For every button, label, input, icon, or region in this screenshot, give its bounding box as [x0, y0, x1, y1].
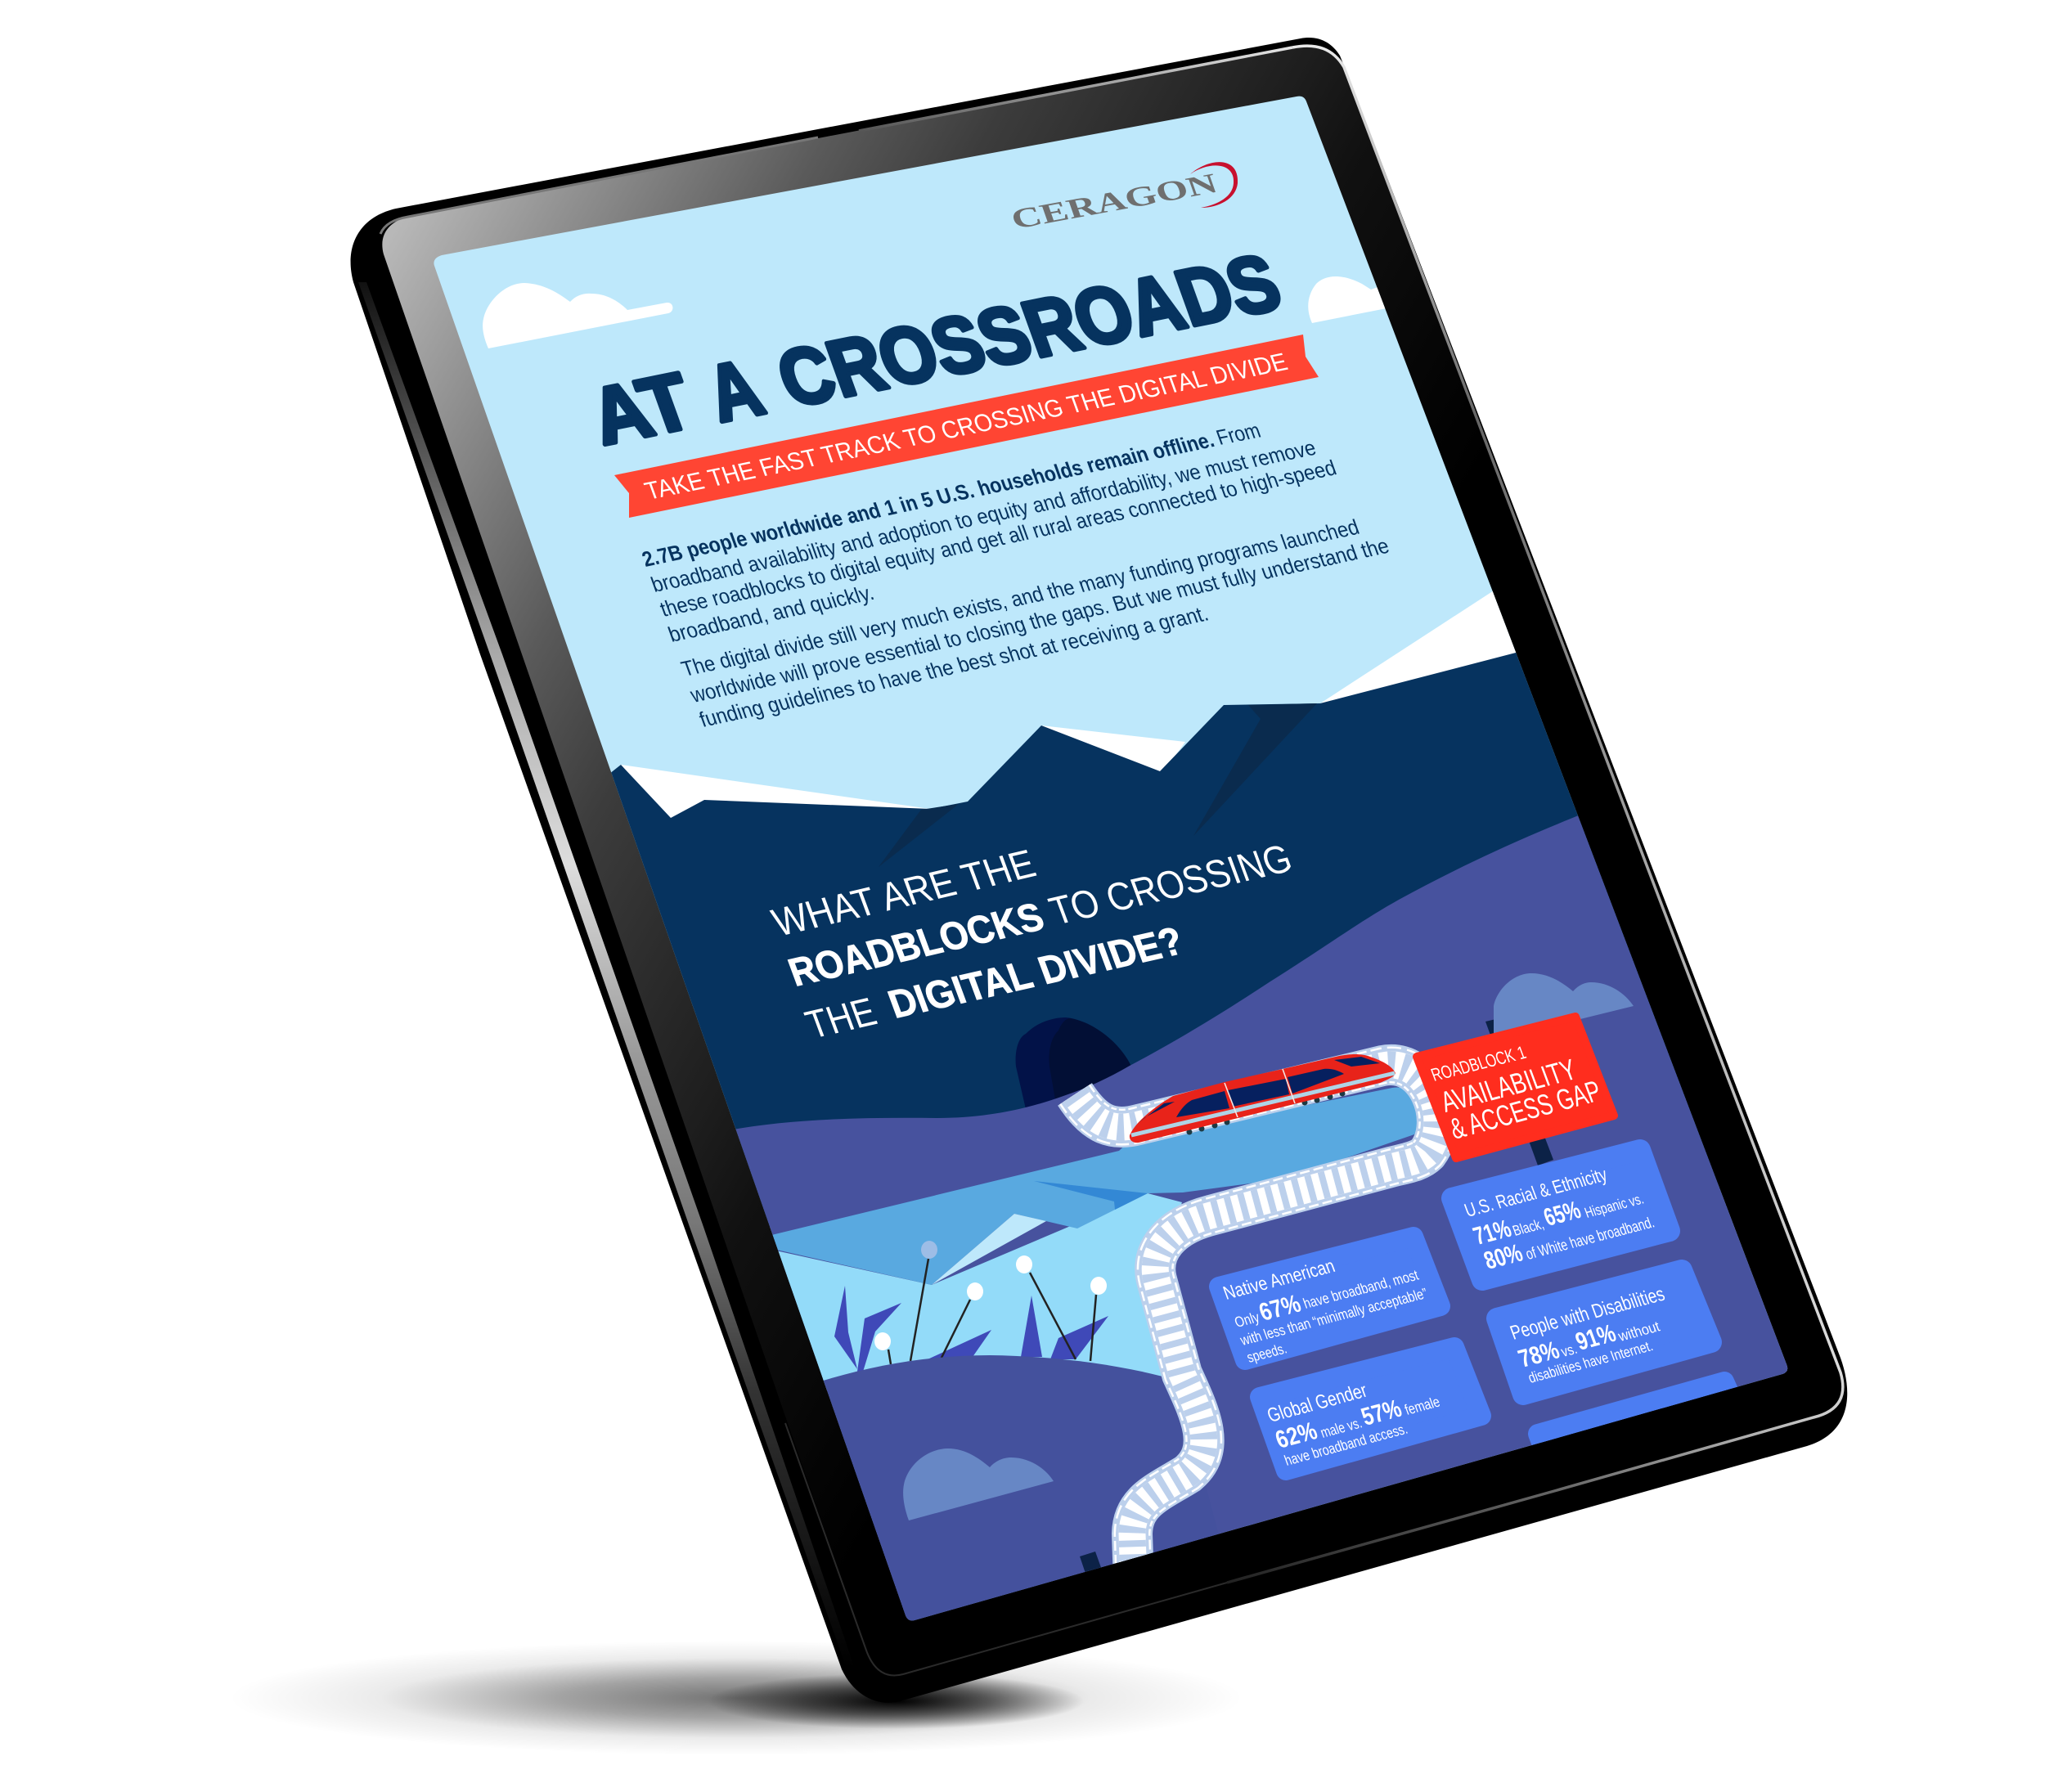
dark mountains: [605, 622, 1718, 1227]
cloud: upper right: [1494, 973, 1634, 1034]
light blue field: [761, 1193, 1182, 1390]
mountain shadows: [879, 703, 1317, 867]
foreground hill: [823, 1355, 1219, 1621]
intro paragraph: broadband, and quickly.: [665, 582, 877, 647]
tablet mockup infographic: [293, 38, 1847, 1748]
sign post 2: [1080, 1552, 1101, 1572]
card: U.S. racial and ethnicity: U.S. Racial & Ethnicity: [1461, 1163, 1611, 1221]
card: people with disabilities: [1497, 1270, 1711, 1395]
purple landscape: [736, 815, 1788, 1621]
card: native american: 67%: [1256, 1290, 1305, 1327]
card: people with disabilities: disabilities have Internet.: [1526, 1337, 1655, 1386]
pale mountain facet: [932, 1214, 1046, 1285]
card: people with disabilities: People with Disabilities: [1507, 1282, 1668, 1345]
title: CROSSROADS: [766, 237, 1292, 424]
title: [578, 237, 1292, 461]
roadblocks heading: [766, 837, 1298, 1048]
card: U.S. racial and ethnicity: [1452, 1150, 1670, 1280]
card: global gender: 57%: [1358, 1395, 1405, 1431]
train stripe: [1131, 1073, 1395, 1135]
card: native american: speeds.: [1244, 1340, 1289, 1366]
title: AT: [578, 356, 704, 461]
intro paragraph: broadband availability and adoption to equity and affordability, we must remove: [648, 437, 1319, 597]
train body: [1130, 1054, 1396, 1143]
card: global gender: 62%: [1272, 1417, 1321, 1454]
card: native american: [1219, 1237, 1440, 1366]
sign: roadblock 1: [1417, 1017, 1614, 1158]
intro paragraph: these roadblocks to digital equity and get all rural areas connected to high-speed: [657, 456, 1340, 622]
train car dividers: [1225, 1069, 1295, 1117]
ground shadow: [229, 1641, 1243, 1755]
plants: [834, 1241, 1108, 1372]
card: native american: Native American: [1220, 1255, 1337, 1304]
roadblocks heading: WHAT ARE THE: [766, 842, 1041, 945]
intro paragraph: From: [1213, 420, 1264, 450]
card: global gender: male vs.: [1318, 1414, 1364, 1441]
card: people with disabilities: without: [1615, 1318, 1662, 1345]
second paragraph: The digital divide still very much exists, and the many funding programs launched: [678, 516, 1363, 681]
intro paragraph: 2.7B people worldwide and 1 in 5 U.S. households remain offline.: [639, 429, 1217, 572]
card: fifth, cropped by bezel: [1528, 1372, 1737, 1445]
tablet body: [351, 38, 1847, 1703]
stems: [888, 1259, 1096, 1364]
title: A: [694, 343, 774, 438]
screen: [434, 97, 1788, 1621]
train windows: [1137, 1057, 1380, 1124]
sign title line 2: & ACCESS GAP: [1445, 1075, 1606, 1146]
second paragraph: funding guidelines to have the best shot at receiving a grant.: [696, 602, 1211, 732]
roadblocks heading: THE: [800, 990, 883, 1048]
card: U.S. racial and ethnicity: Black,: [1510, 1215, 1546, 1239]
cloud: lower left: [903, 1448, 1054, 1520]
card: global gender: have broadband access.: [1282, 1420, 1410, 1469]
roadblocks heading: DIGITAL DIVIDE?: [883, 919, 1189, 1027]
river dark facet: [1034, 1181, 1148, 1210]
logo: ceragon: CERAGON: [1007, 168, 1222, 236]
sky background: [409, 82, 1816, 1636]
card: U.S. racial and ethnicity: Hispanic vs.: [1582, 1190, 1646, 1221]
card: global gender: female: [1402, 1393, 1442, 1418]
sign post 1: [1485, 1018, 1553, 1165]
card: people with disabilities: vs.: [1558, 1341, 1580, 1360]
card: native american: with less than “minimally acceptable”: [1237, 1285, 1430, 1349]
seed heads: [874, 1241, 1107, 1350]
card: native american: have broadband, most: [1301, 1266, 1421, 1312]
roadblocks heading: ROADBLOCKS: [783, 895, 1049, 995]
roadblocks heading: TO CROSSING: [1044, 837, 1298, 934]
card: native american: Only: [1232, 1309, 1262, 1331]
railway track: [1075, 1065, 1437, 1583]
logo: ceragon: [1007, 162, 1238, 236]
tunnel opening: [1016, 1017, 1130, 1107]
second paragraph: worldwide will prove essential to closing the gaps. But we must fully understand the: [686, 535, 1392, 707]
card: U.S. racial and ethnicity: 65%: [1540, 1197, 1584, 1232]
card: U.S. racial and ethnicity: of White have broadband.: [1523, 1213, 1656, 1263]
leaves: [834, 1286, 1108, 1372]
card: global gender: Global Gender: [1264, 1379, 1370, 1427]
subtitle banner: TAKE THE FAST TRACK TO CROSSING THE DIGITAL DIVIDE: [641, 348, 1291, 505]
card: people with disabilities: 91%: [1572, 1319, 1620, 1356]
red sliver of next sign: [1002, 1579, 1063, 1603]
card: U.S. racial and ethnicity: 71%: [1470, 1215, 1515, 1251]
cloud: top left: [483, 283, 672, 348]
wheels: [1186, 1091, 1345, 1135]
card: global gender: [1260, 1347, 1481, 1471]
card: people with disabilities: 78%: [1515, 1336, 1563, 1373]
card: U.S. racial and ethnicity: 80%: [1481, 1239, 1526, 1275]
cloud: top right: [1308, 276, 1386, 323]
sign title line 1: AVAILABILITY: [1436, 1053, 1580, 1119]
train: [1130, 1054, 1396, 1143]
sign label: ROADBLOCK 1: [1428, 1042, 1529, 1085]
mountain snow: [621, 591, 1517, 818]
river: [765, 1087, 1419, 1285]
